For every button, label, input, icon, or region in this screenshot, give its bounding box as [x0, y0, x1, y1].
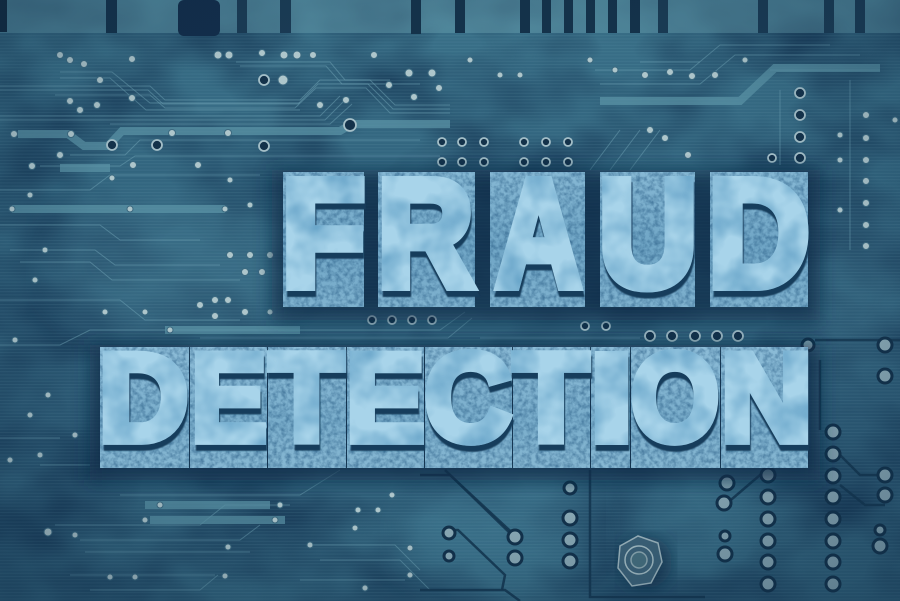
- via row between the words: [368, 316, 892, 383]
- letter shadows: DETECTION: O: [632, 336, 720, 474]
- letter shadows: FRAUD: F: [283, 155, 366, 324]
- letter faces: DETECTION: E: [346, 329, 424, 467]
- letter faces: FRAUD: D: [708, 149, 810, 318]
- through-hole pads, lower right: [443, 425, 892, 591]
- via clusters above FRAUD: [438, 138, 572, 166]
- letter shadows: DETECTION: E: [347, 335, 425, 473]
- letter faces: DETECTION: C: [425, 329, 511, 467]
- title block: FRAUD: [282, 148, 811, 325]
- letter faces: DETECTION: [99, 328, 812, 468]
- letter faces: DETECTION: E: [191, 330, 267, 468]
- letter shadows: FRAUD: R: [378, 156, 474, 325]
- letter faces: DETECTION: N: [721, 329, 812, 467]
- letter faces: DETECTION: I: [590, 329, 633, 467]
- letter shadows: DETECTION: D: [100, 336, 189, 474]
- letter shadows: FRAUD: U: [600, 154, 698, 324]
- letter faces: FRAUD: R: [378, 150, 473, 319]
- title block: DETECTION: [99, 328, 813, 474]
- letter faces: FRAUD: F: [282, 149, 365, 318]
- letter faces: DETECTION: T: [270, 328, 343, 467]
- letter faces: FRAUD: A: [496, 148, 581, 318]
- letter shadows: DETECTION: C: [426, 335, 512, 473]
- letter faces: FRAUD: [282, 148, 810, 319]
- letter shadows: FRAUD: D: [709, 155, 811, 324]
- letter shadows: FRAUD: [283, 154, 811, 325]
- metal type blocks: DETECTION: [100, 347, 808, 468]
- letter shadows: DETECTION: E: [192, 336, 268, 474]
- letter faces: DETECTION: O: [631, 330, 719, 468]
- letter shadows: FRAUD: A: [497, 154, 582, 324]
- letter shadows: DETECTION: T: [271, 334, 344, 473]
- letter faces: DETECTION: D: [99, 330, 188, 468]
- letter shadows: DETECTION: I: [591, 335, 634, 473]
- letter shadows: DETECTION: T: [515, 336, 589, 474]
- letter faces: DETECTION: T: [514, 330, 588, 468]
- letter shadows: DETECTION: [100, 334, 813, 474]
- connector strip along the top edge: [0, 0, 900, 36]
- letter faces: FRAUD: U: [599, 148, 697, 318]
- letter shadows: DETECTION: N: [722, 335, 813, 473]
- metal type blocks: FRAUD: [283, 172, 808, 307]
- icon: hex bolt on the board: [618, 536, 672, 588]
